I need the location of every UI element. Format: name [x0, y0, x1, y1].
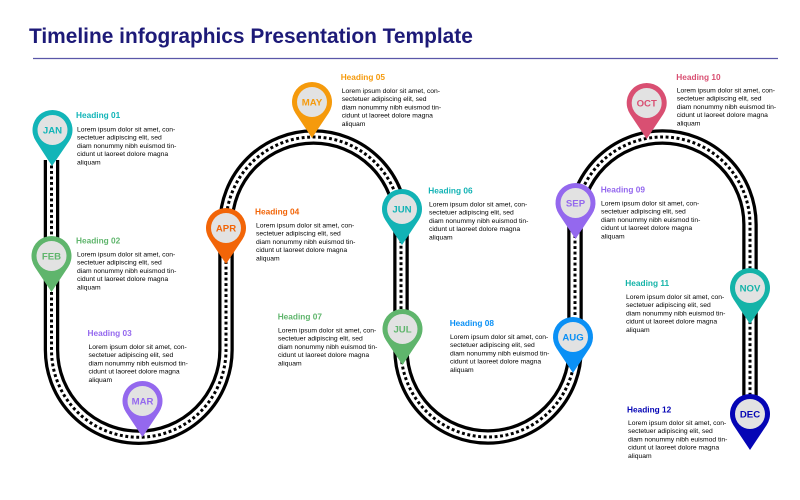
text block 11: sectetuer adipiscing elit, sed — [626, 302, 711, 309]
text block 06: diam nonummy nibh euismod tin- — [429, 218, 528, 225]
text block 09: sectetuer adipiscing elit, sed — [601, 209, 686, 216]
text block 02: sectetuer adipiscing elit, sed — [77, 260, 162, 267]
text block 03: Lorem ipsum dolor sit amet, con- — [88, 344, 187, 351]
panel: April — [206, 206, 355, 264]
pin: AUG — [553, 317, 593, 373]
heading 12: Heading 12 — [627, 404, 672, 414]
panel: August — [450, 317, 593, 374]
pin: JUL — [382, 309, 422, 365]
pin: DEC: DEC — [740, 410, 760, 420]
text block 01: diam nonummy nibh euismod tin- — [77, 143, 176, 150]
text block 07: Lorem ipsum dolor sit amet, con- — [278, 328, 376, 334]
panel: June — [382, 186, 528, 245]
pin: FEB: FEB — [42, 252, 61, 262]
text block 12: cidunt ut laoreet dolore magna — [628, 445, 719, 452]
text block 09: cidunt ut laoreet dolore magna — [601, 225, 692, 232]
text block 03: aliquam — [88, 377, 113, 384]
panel: May — [292, 72, 441, 138]
text block 04: cidunt ut laoreet dolore magna — [256, 247, 347, 254]
text block 12: sectetuer adipiscing elit, sed — [628, 428, 713, 435]
pin: OCT: OCT — [637, 98, 657, 110]
pin: OCT — [627, 83, 667, 139]
pin: JAN: JAN — [43, 126, 62, 136]
panel: February — [32, 236, 176, 292]
text block 04: sectetuer adipiscing elit, sed — [256, 231, 341, 238]
text block 12: Lorem ipsum dolor sit amet, con- — [628, 420, 726, 427]
text block 08: Lorem ipsum dolor sit amet, con- — [450, 334, 548, 341]
pin: APR — [206, 208, 246, 264]
pin: AUG: AUG — [562, 332, 584, 344]
text block 08: cidunt ut laoreet dolore magna — [450, 359, 541, 366]
text block 07: sectetuer adipiscing elit, sed — [278, 336, 363, 343]
text block 05: sectetuer adipiscing elit, sed — [342, 96, 427, 103]
text block 08: diam nonummy nibh euismod tin- — [450, 350, 549, 357]
panel: November — [625, 268, 770, 334]
text block 10: Lorem ipsum dolor sit amet, con- — [677, 88, 775, 94]
text block 04: diam nonummy nibh euismod tin- — [256, 239, 355, 246]
panel: September — [556, 183, 700, 240]
panel: December — [627, 394, 770, 460]
text block 06: Lorem ipsum dolor sit amet, con- — [429, 202, 527, 208]
pin: JUN: JUN — [392, 204, 412, 216]
pin: MAR: MAR — [132, 396, 153, 408]
pin: APR: APR — [216, 224, 236, 234]
text block 02: cidunt ut laoreet dolore magna — [77, 276, 168, 283]
heading 11: Heading 11 — [625, 278, 669, 288]
text block 10: diam nonummy nibh euismod tin- — [677, 104, 776, 111]
panel: July — [278, 309, 422, 367]
pin: SEP — [556, 183, 596, 239]
heading 10: Heading 10 — [676, 72, 721, 82]
text block 08: sectetuer adipiscing elit, sed — [450, 342, 535, 349]
text block 01: Lorem ipsum dolor sit amet, con- — [77, 126, 175, 134]
heading 06: Heading 06 — [428, 186, 473, 196]
pin: MAY: MAY — [302, 98, 323, 108]
text block 04: Lorem ipsum dolor sit amet, con- — [256, 222, 354, 230]
text block 06: sectetuer adipiscing elit, sed — [429, 210, 514, 217]
text block 01: cidunt ut laoreet dolore magna — [77, 151, 168, 158]
text block 05: diam nonummy nibh euismod tin- — [342, 104, 441, 111]
text block 12: diam nonummy nibh euismod tin- — [628, 436, 727, 443]
text block 04: aliquam — [256, 255, 280, 262]
text block 11: cidunt ut laoreet dolore magna — [626, 319, 717, 326]
panel: March — [88, 328, 188, 437]
text block 06: cidunt ut laoreet dolore magna — [429, 226, 520, 233]
heading 05: Heading 05 — [341, 72, 385, 82]
text block 12: aliquam — [628, 453, 652, 460]
text block 10: sectetuer adipiscing elit, sed — [677, 96, 762, 103]
pin: MAY — [292, 82, 332, 138]
pin: NOV — [730, 268, 770, 324]
pin: NOV: NOV — [740, 284, 761, 294]
heading 09: Heading 09 — [601, 184, 645, 194]
text block 01: aliquam — [77, 159, 101, 166]
text block 09: aliquam — [601, 233, 625, 240]
text block 07: aliquam — [278, 360, 302, 367]
heading 04: Heading 04 — [255, 206, 300, 216]
pin: DEC — [730, 394, 770, 450]
text block 03: cidunt ut laoreet dolore magna — [88, 369, 180, 376]
text block 07: diam nonummy nibh euismod tin- — [278, 344, 377, 351]
panel: October — [627, 72, 776, 139]
text block 10: aliquam — [677, 120, 701, 127]
text block 06: aliquam — [429, 234, 453, 241]
pin: FEB — [32, 236, 72, 292]
pin: SEP: SEP — [566, 198, 586, 210]
text block 10: cidunt ut laoreet dolore magna — [677, 112, 768, 119]
text block 02: Lorem ipsum dolor sit amet, con- — [77, 252, 175, 258]
text block 01: sectetuer adipiscing elit, sed — [77, 135, 162, 142]
pin: JAN — [32, 110, 72, 166]
text block 03: sectetuer adipiscing elit, sed — [88, 352, 174, 359]
heading 08: Heading 08 — [450, 318, 494, 328]
heading 03: Heading 03 — [88, 328, 132, 338]
text block 05: Lorem ipsum dolor sit amet, con- — [342, 88, 440, 95]
pin: JUN — [382, 189, 422, 245]
pin: JUL: JUL — [393, 324, 412, 336]
winding road — [52, 137, 750, 437]
text block 09: diam nonummy nibh euismod tin- — [601, 217, 700, 224]
text block 11: Lorem ipsum dolor sit amet, con- — [626, 294, 724, 301]
panel: January — [32, 110, 176, 166]
text block 02: aliquam — [77, 284, 101, 291]
text block 05: cidunt ut laoreet dolore magna — [342, 113, 433, 120]
text block 11: diam nonummy nibh euismod tin- — [626, 310, 725, 317]
text block 07: cidunt ut laoreet dolore magna — [278, 352, 369, 359]
text block 11: aliquam — [626, 327, 650, 334]
heading 07: Heading 07 — [278, 312, 322, 322]
text block 08: aliquam — [450, 367, 474, 374]
text block 09: Lorem ipsum dolor sit amet, con- — [601, 200, 699, 208]
heading 01: Heading 01 — [76, 110, 121, 120]
heading 02: Heading 02 — [76, 236, 121, 246]
title: Timeline infographics Presentation Template — [29, 25, 473, 48]
text block 05: aliquam — [342, 121, 366, 128]
text block 03: diam nonummy nibh euismod tin- — [88, 360, 188, 367]
text block 02: diam nonummy nibh euismod tin- — [77, 268, 176, 275]
